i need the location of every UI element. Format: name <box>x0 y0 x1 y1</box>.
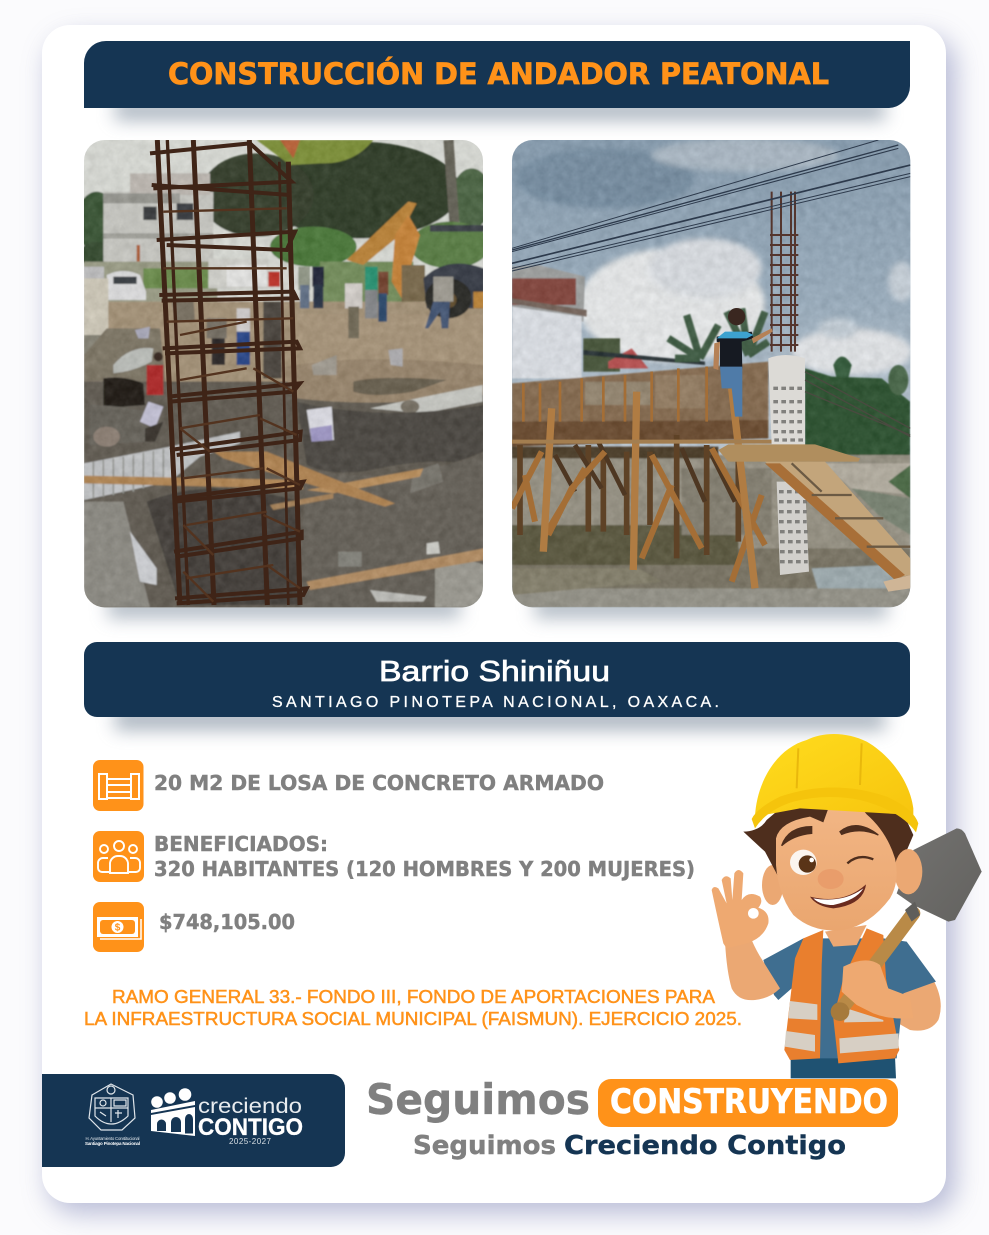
handle <box>838 913 913 1013</box>
nose <box>818 869 844 889</box>
municipality: SANTIAGO PINOTEPA NACIONAL, OAXACA. <box>272 694 719 711</box>
wires <box>512 140 910 437</box>
people <box>268 272 280 287</box>
rebar tower <box>770 192 798 352</box>
text: beneficiaries: BENEFICIADOS: <box>154 832 328 856</box>
shirt <box>763 938 936 1058</box>
right arm far <box>883 980 941 1031</box>
ramp <box>765 462 910 578</box>
logo: creciendo contigo: CONTIGO <box>198 1114 303 1141</box>
logo: municipal seal: H. Ayuntamiento Constitucional <box>86 1136 140 1141</box>
slogan: seguimos creciendo contigo: Seguimos <box>413 1131 556 1161</box>
logo: creciendo contigo <box>151 1088 303 1146</box>
location name: Barrio Shiniñuu <box>379 656 610 688</box>
smile <box>810 884 866 908</box>
pants <box>791 1057 896 1078</box>
logo: creciendo contigo: creciendo <box>198 1095 302 1118</box>
photo: workers around rebar column at the site <box>77 135 492 615</box>
logo: municipal seal <box>85 1084 140 1146</box>
icon: people <box>93 831 144 882</box>
funding source note: LA INFRAESTRUCTURA SOCIAL MUNICIPAL (FAISMUN). EJERCICIO 2025. <box>84 1008 742 1029</box>
icon: money <box>93 902 144 952</box>
photo shadows <box>108 596 887 618</box>
slogan: seguimos creciendo contigo <box>413 1131 846 1161</box>
raised arm with OK hand <box>725 940 780 1000</box>
rebar cage <box>150 140 307 605</box>
text: slab area: 20 M2 DE LOSA DE CONCRETO ARMADO <box>154 771 604 795</box>
location banner <box>84 642 910 730</box>
photo grain <box>84 140 483 607</box>
planks <box>84 476 303 489</box>
hand on handle <box>842 960 913 1019</box>
icon: money: $ <box>115 922 121 934</box>
funding source note: RAMO GENERAL 33.- FONDO III, FONDO DE APORTACIONES PARA <box>112 986 716 1007</box>
backhoe <box>347 202 417 265</box>
title text: CONSTRUCCIÓN DE ANDADOR PEATONAL <box>168 57 829 91</box>
formwork posts <box>512 367 772 588</box>
neck <box>825 925 867 947</box>
logo: municipal seal: Santiago Pinotepa Nacional <box>85 1141 140 1146</box>
text: beneficiaries <box>154 832 695 881</box>
funding source note <box>84 986 742 1029</box>
eye <box>790 850 817 875</box>
title banner <box>84 41 910 120</box>
slogan: seguimos: Seguimos <box>366 1075 590 1124</box>
text: beneficiaries: 320 HABITANTES (120 HOMBRES Y 200 MUJERES) <box>154 857 695 881</box>
vest <box>784 930 823 1060</box>
slogan: construyendo pill: CONSTRUYENDO <box>610 1082 888 1122</box>
concrete column <box>768 355 805 445</box>
eyebrows <box>782 826 878 846</box>
left ear <box>762 865 783 905</box>
shovel blade <box>897 828 982 922</box>
photo: man standing on bridge formwork <box>505 135 915 615</box>
slogan: seguimos creciendo contigo: Creciendo Contigo <box>564 1131 846 1161</box>
icon: concrete slab <box>93 760 144 811</box>
right ear <box>894 849 922 894</box>
wink <box>847 857 873 863</box>
logo: creciendo contigo: 2025-2027 <box>229 1137 272 1146</box>
palms <box>668 308 768 358</box>
photo grain <box>512 140 910 607</box>
helmet <box>755 734 913 817</box>
text: investment amount: $748,105.00 <box>159 910 295 934</box>
footer logo panel <box>42 1074 345 1167</box>
illustration: worker boy with shovel <box>712 734 982 1078</box>
hair back <box>743 792 913 880</box>
man <box>728 308 745 325</box>
face <box>776 802 897 931</box>
